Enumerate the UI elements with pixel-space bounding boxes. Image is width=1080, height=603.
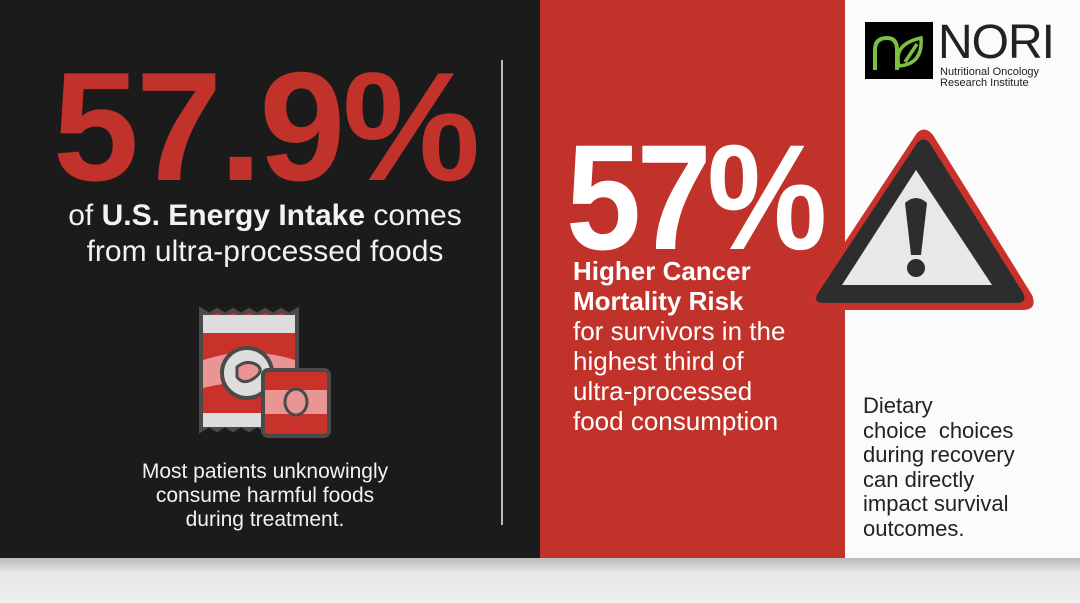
bottom shadow band [0,556,1080,603]
big stat 57%: 57% [566,113,823,281]
big stat 57.9%: 57.9% [53,40,477,213]
stat description: Mortality Risk [573,286,744,316]
stat description: of U.S. Energy Intake comes [68,199,462,232]
stat description: highest third of [573,346,744,376]
panel: red middle [540,0,845,558]
logo: Nutritional Oncology [940,66,1039,78]
icon: leaf logo [865,22,933,79]
stat description: ultra-processed [573,376,752,406]
caption: consume harmful foods [156,484,374,507]
text block [863,393,1015,540]
logo: NORI [938,16,1054,69]
icon: warning triangle [816,130,1034,310]
logo [865,16,1054,89]
panel: white right [845,0,1080,558]
stat description [573,256,785,436]
stat description: Higher Cancer [573,256,751,286]
text block: during recovery [863,442,1015,467]
panel: dark left [0,0,540,558]
caption: during treatment. [186,508,344,531]
caption: Most patients unknowingly [142,460,388,483]
icon: snack bag and can [199,306,331,438]
text block: Dietary [863,393,933,418]
caption [142,460,388,531]
stat description: for survivors in the [573,316,785,346]
divider [501,60,503,525]
stat description: from ultra-processed foods [87,235,443,268]
text block: impact survival [863,491,1008,516]
text block: choice choices [863,418,1013,442]
stat description: food consumption [573,406,778,436]
stat description [68,199,462,268]
panel: white right: Research Institute [940,77,1029,89]
text block: can directly [863,466,974,492]
text block: outcomes. [863,516,964,540]
